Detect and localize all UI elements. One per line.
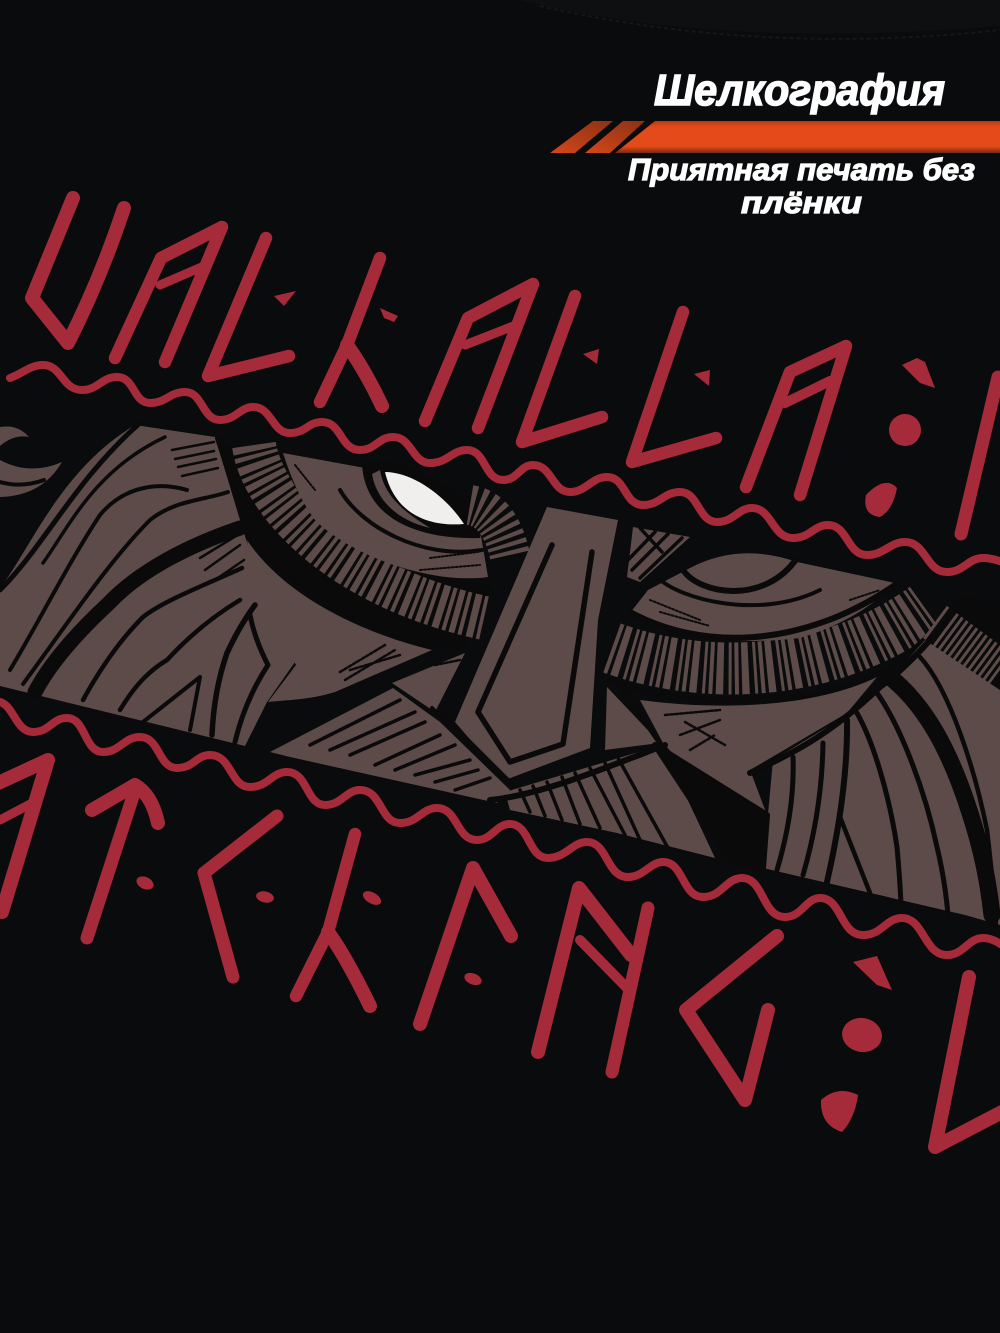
right eye — [630, 553, 895, 641]
viking face artwork — [0, 423, 1000, 925]
top rune line: VALKALLA — [32, 198, 998, 534]
title: Шелкография — [654, 66, 945, 115]
lower left hatching — [270, 688, 520, 803]
hatch above right eye — [627, 527, 690, 582]
heading badge — [550, 66, 1000, 220]
nose — [455, 507, 618, 780]
top wavy line — [10, 365, 1000, 572]
subtitle: плёнки — [741, 185, 862, 220]
left cheek — [247, 540, 465, 712]
hatch beside left eye — [470, 505, 510, 556]
left brow hatching — [222, 445, 490, 650]
right brow hatching — [610, 585, 963, 700]
bottom wavy line — [0, 702, 1000, 955]
left eye socket — [283, 453, 488, 578]
crescent ornament — [0, 426, 62, 497]
subtitle — [628, 152, 975, 220]
lower centre hatching — [490, 745, 767, 868]
right cheek — [605, 677, 877, 815]
eye white — [385, 472, 464, 524]
bottom rune line — [0, 760, 1000, 1147]
subtitle: Приятная печать без — [628, 152, 975, 187]
left hair — [0, 423, 295, 746]
right hair — [750, 598, 1000, 925]
orange stripes — [550, 121, 1000, 153]
